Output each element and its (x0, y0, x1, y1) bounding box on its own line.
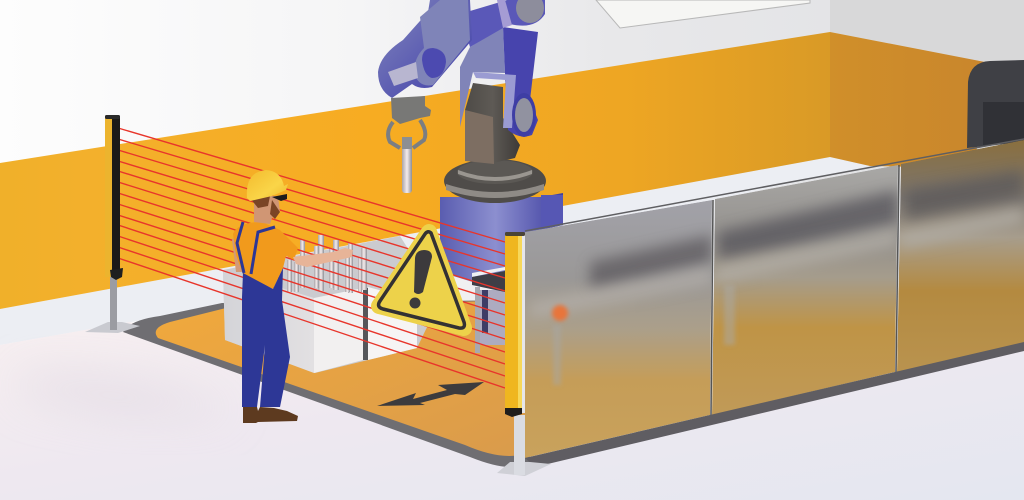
panel frame lines (525, 139, 1024, 416)
worker hard hat (247, 170, 288, 201)
light curtain beams (118, 128, 505, 388)
right light curtain post (497, 232, 551, 476)
worker neck and face (254, 196, 280, 224)
skirting (0, 157, 870, 345)
worker legs and overalls (242, 268, 290, 407)
floor arrow: double headed (377, 382, 484, 406)
worker boots (243, 407, 298, 423)
exclamation mark (414, 250, 432, 294)
robot upper arm (460, 27, 538, 137)
machine block (223, 236, 440, 373)
robot arm (378, 0, 563, 292)
overall straps (237, 222, 275, 274)
worker (232, 170, 353, 423)
ceiling fixture (596, 0, 810, 28)
orange wall band (0, 32, 985, 309)
robot gripper (388, 96, 431, 193)
robot wrist arm (378, 0, 472, 98)
floor shadow (20, 374, 240, 415)
robot base pedestal (440, 193, 563, 292)
exclamation dot (410, 298, 420, 308)
glass panel 2 (712, 165, 898, 415)
worker beard (270, 200, 280, 219)
glass panel 3 (897, 140, 1024, 372)
machine cabinet (967, 60, 1024, 148)
robot shoulder (460, 0, 545, 47)
left light curtain post (85, 115, 140, 333)
robot turntable (444, 159, 546, 203)
conveyor behind sign (472, 267, 505, 353)
robot forearm stone block (465, 83, 520, 164)
warning sign (379, 232, 464, 328)
worker glasses (272, 194, 287, 201)
panel base strip (525, 342, 1024, 467)
worker left arm (232, 232, 244, 272)
worker shirt (233, 222, 298, 289)
glass panel 1 (525, 200, 712, 458)
floor: grey border and orange work zone (123, 300, 530, 467)
metal pins on block (287, 235, 367, 293)
worker arm (293, 248, 353, 267)
floor (0, 322, 1024, 500)
worker hair (250, 196, 270, 208)
